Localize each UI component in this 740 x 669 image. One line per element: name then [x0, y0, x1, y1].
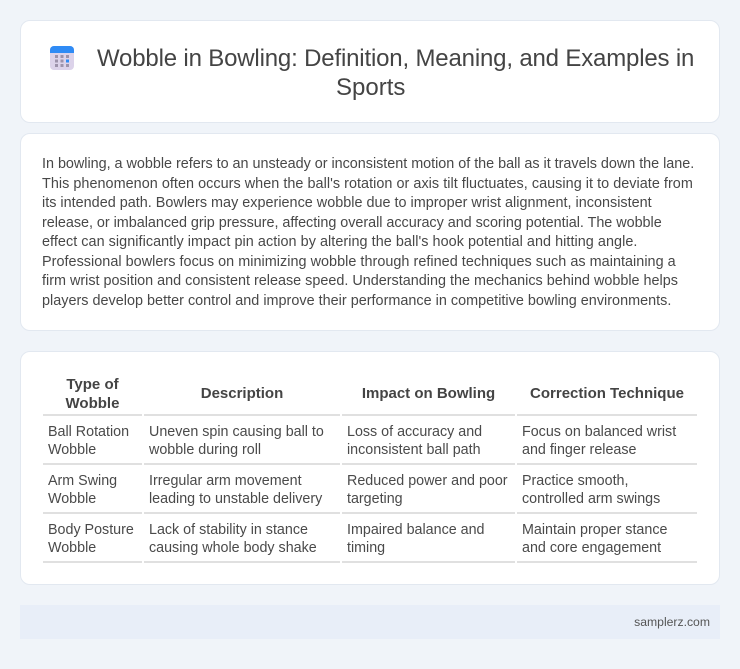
- panel: wobble table: Lack of stability in stance: [149, 522, 308, 538]
- panel: intro paragraph: firm wrist position and consistent release speed. Understanding the mechanics behind wobble helps: [42, 273, 678, 289]
- table header: [66, 376, 684, 412]
- panel: wobble table: causing whole body shake: [149, 540, 317, 556]
- panel: intro paragraph: effect can significantly impact pin action by altering the ball's hook potential and hitting angle.: [42, 234, 637, 250]
- panel: wobble table: Wobble: [48, 442, 96, 458]
- panel: wobble table: Arm Swing: [48, 473, 117, 489]
- panel: wobble table: Wobble: [66, 395, 119, 412]
- panel: wobble table: Irregular arm movement: [149, 473, 302, 489]
- panel: wobble table: Wobble: [48, 540, 96, 556]
- panel: intro paragraph: Professional bowlers focus on minimizing wobble through refined techniques such as maintaining a: [42, 254, 676, 270]
- panel: wobble table: and core engagement: [522, 540, 661, 556]
- title: Wobble in Bowling: Definition, Meaning, and Examples in: [97, 45, 694, 72]
- row: ball rotation wobble: [48, 424, 676, 458]
- panel: wobble table: Wobble: [48, 491, 96, 507]
- panel: wobble table: Maintain proper stance: [522, 522, 667, 538]
- title: Sports: [336, 74, 405, 101]
- panel: intro paragraph: release, or imbalanced grip pressure, affecting overall accuracy and scoring potential. The wobble: [42, 215, 662, 231]
- panel: wobble table: Impaired balance and: [347, 522, 485, 538]
- panel: wobble table: Practice smooth,: [522, 473, 628, 489]
- panel: wobble table: Description: [201, 385, 283, 402]
- panel: wobble table: Uneven spin causing ball to: [149, 424, 324, 440]
- panel: wobble table: controlled arm swings: [522, 491, 660, 507]
- panel: wobble table: Type of: [66, 376, 119, 393]
- panel: wobble table: Body Posture: [48, 522, 134, 538]
- panel: intro paragraph: its intended path. Bowlers may experience wobble due to improper wrist alignment, inconsistent: [42, 195, 652, 211]
- panel: wobble table: Focus on balanced wrist: [522, 424, 676, 440]
- panel: wobble table: Ball Rotation: [48, 424, 129, 440]
- icon: calendar: [50, 46, 74, 70]
- footer text: samplerz.com: samplerz.com: [634, 615, 710, 629]
- footer bar: [20, 605, 720, 639]
- panel: wobble table: Reduced power and poor: [347, 473, 508, 489]
- header card: [20, 20, 720, 123]
- panel: intro paragraph: This phenomenon often occurs when the ball's rotation or axis tilt fluctuates, causing it to deviate from: [42, 176, 693, 192]
- panel: wobble table: inconsistent ball path: [347, 442, 481, 458]
- panel: wobble table: Impact on Bowling: [362, 385, 495, 402]
- panel: intro paragraph: In bowling, a wobble refers to an unsteady or inconsistent motion of the ball as it travels down the lane.: [42, 156, 694, 172]
- row: body posture wobble: [48, 522, 667, 556]
- title: [97, 45, 694, 101]
- panel: wobble table: wobble during roll: [149, 442, 261, 458]
- panel: intro paragraph: [20, 133, 720, 331]
- panel: intro paragraph: players develop better control and improve their performance in competitive bowling environments.: [42, 293, 671, 309]
- panel: wobble table: timing: [347, 540, 385, 556]
- panel: wobble table: targeting: [347, 491, 403, 507]
- panel: wobble table: Loss of accuracy and: [347, 424, 482, 440]
- row: arm swing wobble: [48, 473, 660, 507]
- panel: wobble table: [20, 351, 720, 585]
- panel: wobble table: Correction Technique: [530, 385, 684, 402]
- panel: wobble table: and finger release: [522, 442, 636, 458]
- panel: wobble table: leading to unstable delivery: [149, 491, 322, 507]
